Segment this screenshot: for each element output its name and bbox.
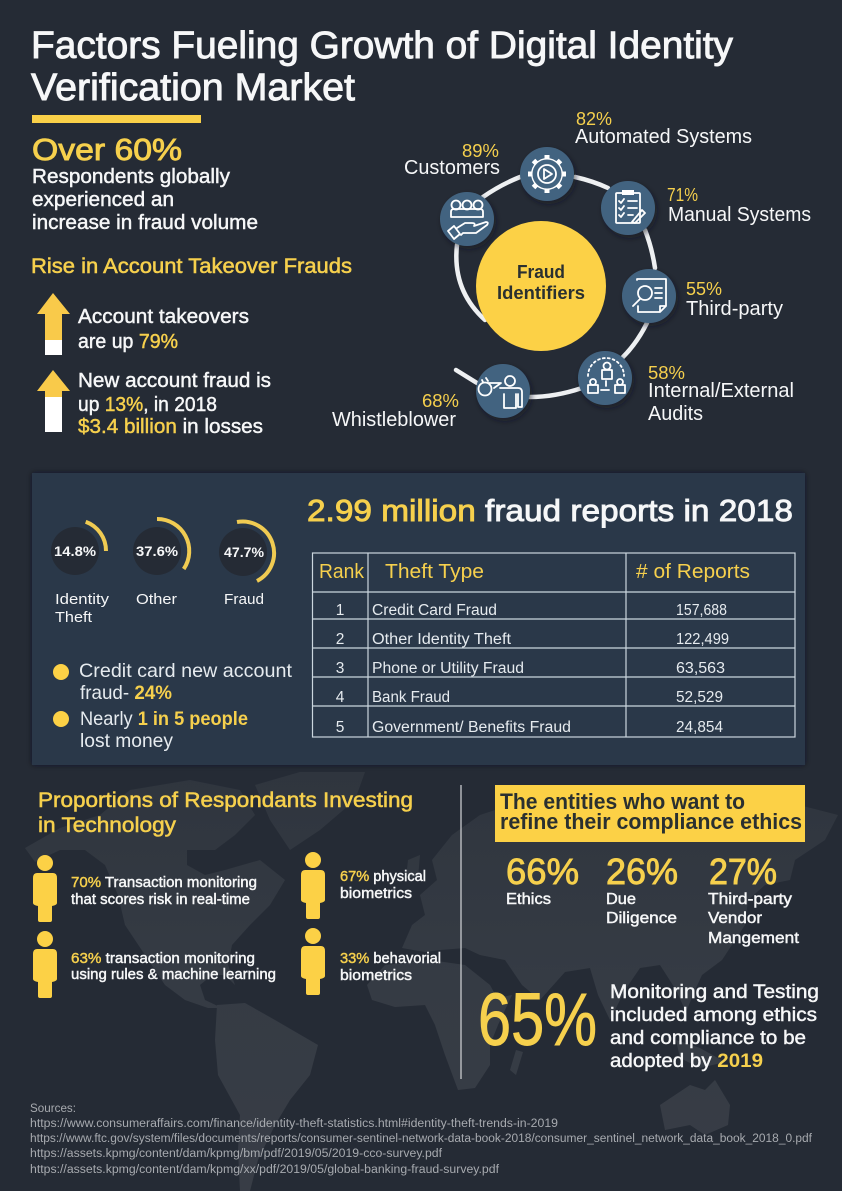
label: internal/external audits: Audits	[648, 403, 703, 425]
stat: 66% ethics: 66%	[506, 851, 579, 892]
callout: entities who want to refine compliance ethics: The entities who want to	[500, 789, 745, 814]
table: theft types: 2	[336, 631, 344, 648]
donut: other 37.6%	[133, 519, 189, 608]
icon: audit people	[578, 351, 632, 405]
icon: person 33%	[301, 928, 325, 995]
stat: 65% monitoring and testing: included among ethics	[610, 1004, 817, 1026]
bullet: nearly 1 in 5 people: lost money	[80, 730, 173, 752]
text: 67% physical biometrics	[340, 868, 426, 902]
stat: 65% monitoring and testing: 65%	[478, 978, 597, 1061]
label: third-party: Third-party	[686, 298, 783, 320]
donut: fraud 47.7%: 47.7%	[224, 544, 265, 560]
label: internal/external audits: 58%	[648, 363, 685, 383]
text: 63% transaction monitoring: 63% transaction monitoring	[71, 950, 255, 967]
label: third-party	[686, 279, 783, 320]
stat: over 60 percent: Respondents globally	[32, 166, 230, 188]
title: Factors Fueling Growth of Digital Identity	[31, 25, 733, 67]
stat: over 60 percent: Over 60%	[32, 132, 182, 167]
table: theft types: 52,529	[676, 689, 723, 706]
diagram: fraud identifiers ring	[332, 109, 811, 431]
stat: 26% due diligence: Due	[606, 891, 636, 908]
title	[31, 25, 733, 109]
text: 70% transaction monitoring: that scores risk in real-time	[71, 891, 250, 908]
bullet: credit card new account fraud	[53, 660, 293, 704]
text: 63% transaction monitoring	[71, 950, 276, 983]
sources: https://assets.kpmg/content/dam/kpmg/bm/pdf/2019/05/2019-cco-survey.pdf	[30, 1148, 443, 1160]
text: account takeovers: are up 79%	[78, 331, 178, 353]
heading: rise in account takeover frauds: Rise in Account Takeover Frauds	[31, 255, 352, 278]
sources: https://assets.kpmg/content/dam/kpmg/xx/pdf/2019/05/global-banking-fraud-survey.pdf	[30, 1164, 500, 1176]
label: manual systems	[667, 185, 811, 226]
stat: 27% third-party vendor management: Vendor	[708, 910, 763, 927]
arrow: account takeovers	[37, 293, 70, 355]
centre circle: fraud identifiers: Fraud	[517, 262, 565, 282]
label: customers: 89%	[462, 141, 499, 161]
table: theft types: 5	[336, 719, 344, 736]
donut: identity theft 14.8%: Theft	[55, 609, 93, 626]
stat: over 60 percent	[32, 132, 258, 234]
icon: gear with play button	[520, 147, 574, 201]
title accent bar	[32, 115, 201, 123]
table: theft types: Credit Card Fraud	[372, 602, 497, 619]
text: account takeovers: Account takeovers	[78, 306, 249, 328]
icon: customers in hand	[440, 192, 494, 246]
text: new account fraud: New account fraud is	[78, 370, 271, 392]
sources: Sources:	[30, 1103, 76, 1115]
label: whistleblower: 68%	[422, 391, 459, 411]
icon: whistleblower	[476, 364, 530, 418]
label: manual systems: 71%	[667, 185, 698, 205]
donut: fraud 47.7%: Fraud	[224, 591, 264, 608]
heading: proportions of respondants: in Technology	[38, 813, 176, 837]
stat: 65% monitoring and testing: adopted by 2019	[610, 1050, 763, 1072]
table: theft types: 4	[336, 689, 345, 706]
text: 33% behavorial biometrics: biometrics	[340, 967, 412, 984]
panel: fraud reports	[32, 473, 805, 765]
text: new account fraud: up 13%, in 2018	[78, 394, 217, 416]
donut: other 37.6%: Other	[136, 591, 177, 608]
label: customers	[404, 141, 500, 179]
stat: 27% third-party vendor management	[708, 851, 800, 947]
text: new account fraud: $3.4 billion in losses	[78, 416, 263, 438]
stat: 65% monitoring and testing: and compliance to be	[610, 1027, 806, 1049]
text: 33% behavorial biometrics	[340, 950, 441, 984]
table: theft types: Theft Type	[385, 561, 484, 583]
world map background	[25, 772, 838, 1191]
sources	[30, 1103, 813, 1176]
table: theft types: Government/ Benefits Fraud	[372, 719, 571, 736]
label: internal/external audits	[648, 363, 794, 425]
label: internal/external audits: Internal/External	[648, 380, 794, 402]
text: 67% physical biometrics: biometrics	[340, 885, 412, 902]
stat: 27% third-party vendor management: 27%	[709, 851, 777, 892]
bullet: credit card new account fraud: Credit card new account	[79, 660, 293, 682]
stat: 26% due diligence: Diligence	[606, 910, 677, 927]
donut: identity theft 14.8%	[51, 522, 110, 626]
donut: identity theft 14.8%: 14.8%	[54, 543, 97, 559]
table: theft types: Rank	[319, 561, 365, 583]
callout: entities who want to refine compliance ethics: refine their compliance ethics	[500, 809, 802, 834]
icon: person 70%	[33, 855, 57, 922]
stat: 27% third-party vendor management: Third-party	[708, 891, 792, 908]
label: manual systems: Manual Systems	[668, 204, 811, 226]
bullet: nearly 1 in 5 people: Nearly 1 in 5 people	[80, 708, 248, 730]
table: theft types: 63,563	[676, 660, 725, 677]
stat: 26% due diligence	[606, 851, 678, 927]
stat: over 60 percent: increase in fraud volume	[32, 212, 258, 234]
icon: person 63%	[33, 931, 57, 998]
stat: 65% monitoring and testing: Monitoring and Testing	[610, 981, 819, 1003]
stat: 26% due diligence: 26%	[606, 851, 678, 892]
text: account takeovers	[78, 306, 249, 353]
label: customers: Customers	[404, 157, 500, 179]
heading: proportions of respondants	[38, 788, 413, 837]
label: whistleblower	[332, 391, 459, 431]
sources: https://www.consumeraffairs.com/finance/identity-theft-statistics.html#identity-theft-trends-in-2019	[30, 1118, 558, 1130]
table: theft types	[312, 553, 795, 737]
donut: identity theft 14.8%: Identity	[55, 591, 110, 608]
centre circle: fraud identifiers	[476, 221, 606, 351]
text: 70% transaction monitoring	[71, 874, 257, 908]
centre circle: fraud identifiers: Identifiers	[497, 283, 585, 303]
icon: person 67%	[301, 852, 325, 919]
bullet: nearly 1 in 5 people	[53, 708, 248, 752]
label: automated systems	[575, 109, 752, 148]
table: theft types: Phone or Utility Fraud	[372, 660, 524, 677]
label: third-party: 55%	[686, 279, 722, 299]
table: theft types: # of Reports	[636, 561, 750, 583]
table: theft types: Other Identity Theft	[372, 631, 512, 648]
stat: 27% third-party vendor management: Mangement	[708, 930, 800, 947]
table: theft types: 24,854	[676, 719, 723, 736]
donut: other 37.6%: 37.6%	[136, 543, 179, 559]
callout: entities who want to refine compliance ethics	[495, 785, 805, 842]
stat: 66% ethics: Ethics	[506, 891, 551, 908]
sources: https://www.ftc.gov/system/files/documents/reports/consumer-sentinel-network-data-book-2018/consumer_sentinel_network_data_book_2018_0.pdf	[30, 1133, 813, 1145]
stat: over 60 percent: experienced an	[32, 189, 174, 211]
label: whistleblower: Whistleblower	[332, 409, 456, 431]
title: Verification Market	[31, 67, 355, 109]
text: 70% transaction monitoring: 70% Transaction monitoring	[71, 874, 257, 891]
bullet: credit card new account fraud: fraud- 24%	[80, 682, 172, 704]
table: theft types: 3	[336, 660, 344, 677]
heading: proportions of respondants: Proportions of Respondants Investing	[38, 788, 413, 812]
table: theft types: 122,499	[676, 631, 729, 648]
heading: 2.99 million fraud reports: 2.99 million fraud reports in 2018	[307, 493, 793, 528]
label: automated systems: 82%	[576, 109, 612, 129]
table: theft types: 157,688	[676, 602, 727, 619]
label: automated systems: Automated Systems	[575, 126, 752, 148]
table: theft types: 1	[336, 602, 344, 619]
text: new account fraud	[78, 370, 271, 438]
table: theft types: Bank Fraud	[372, 689, 450, 706]
text: 67% physical biometrics: 67% physical	[340, 868, 426, 885]
arrow: new account fraud	[37, 370, 70, 432]
text: 63% transaction monitoring: using rules & machine learning	[71, 966, 276, 983]
text: 33% behavorial biometrics: 33% behavorial	[340, 950, 441, 967]
icon: document with magnifier	[622, 269, 676, 323]
donut: fraud 47.7%	[219, 522, 274, 608]
icon: clipboard checklist	[601, 181, 655, 235]
stat: 65% monitoring and testing	[478, 978, 819, 1072]
